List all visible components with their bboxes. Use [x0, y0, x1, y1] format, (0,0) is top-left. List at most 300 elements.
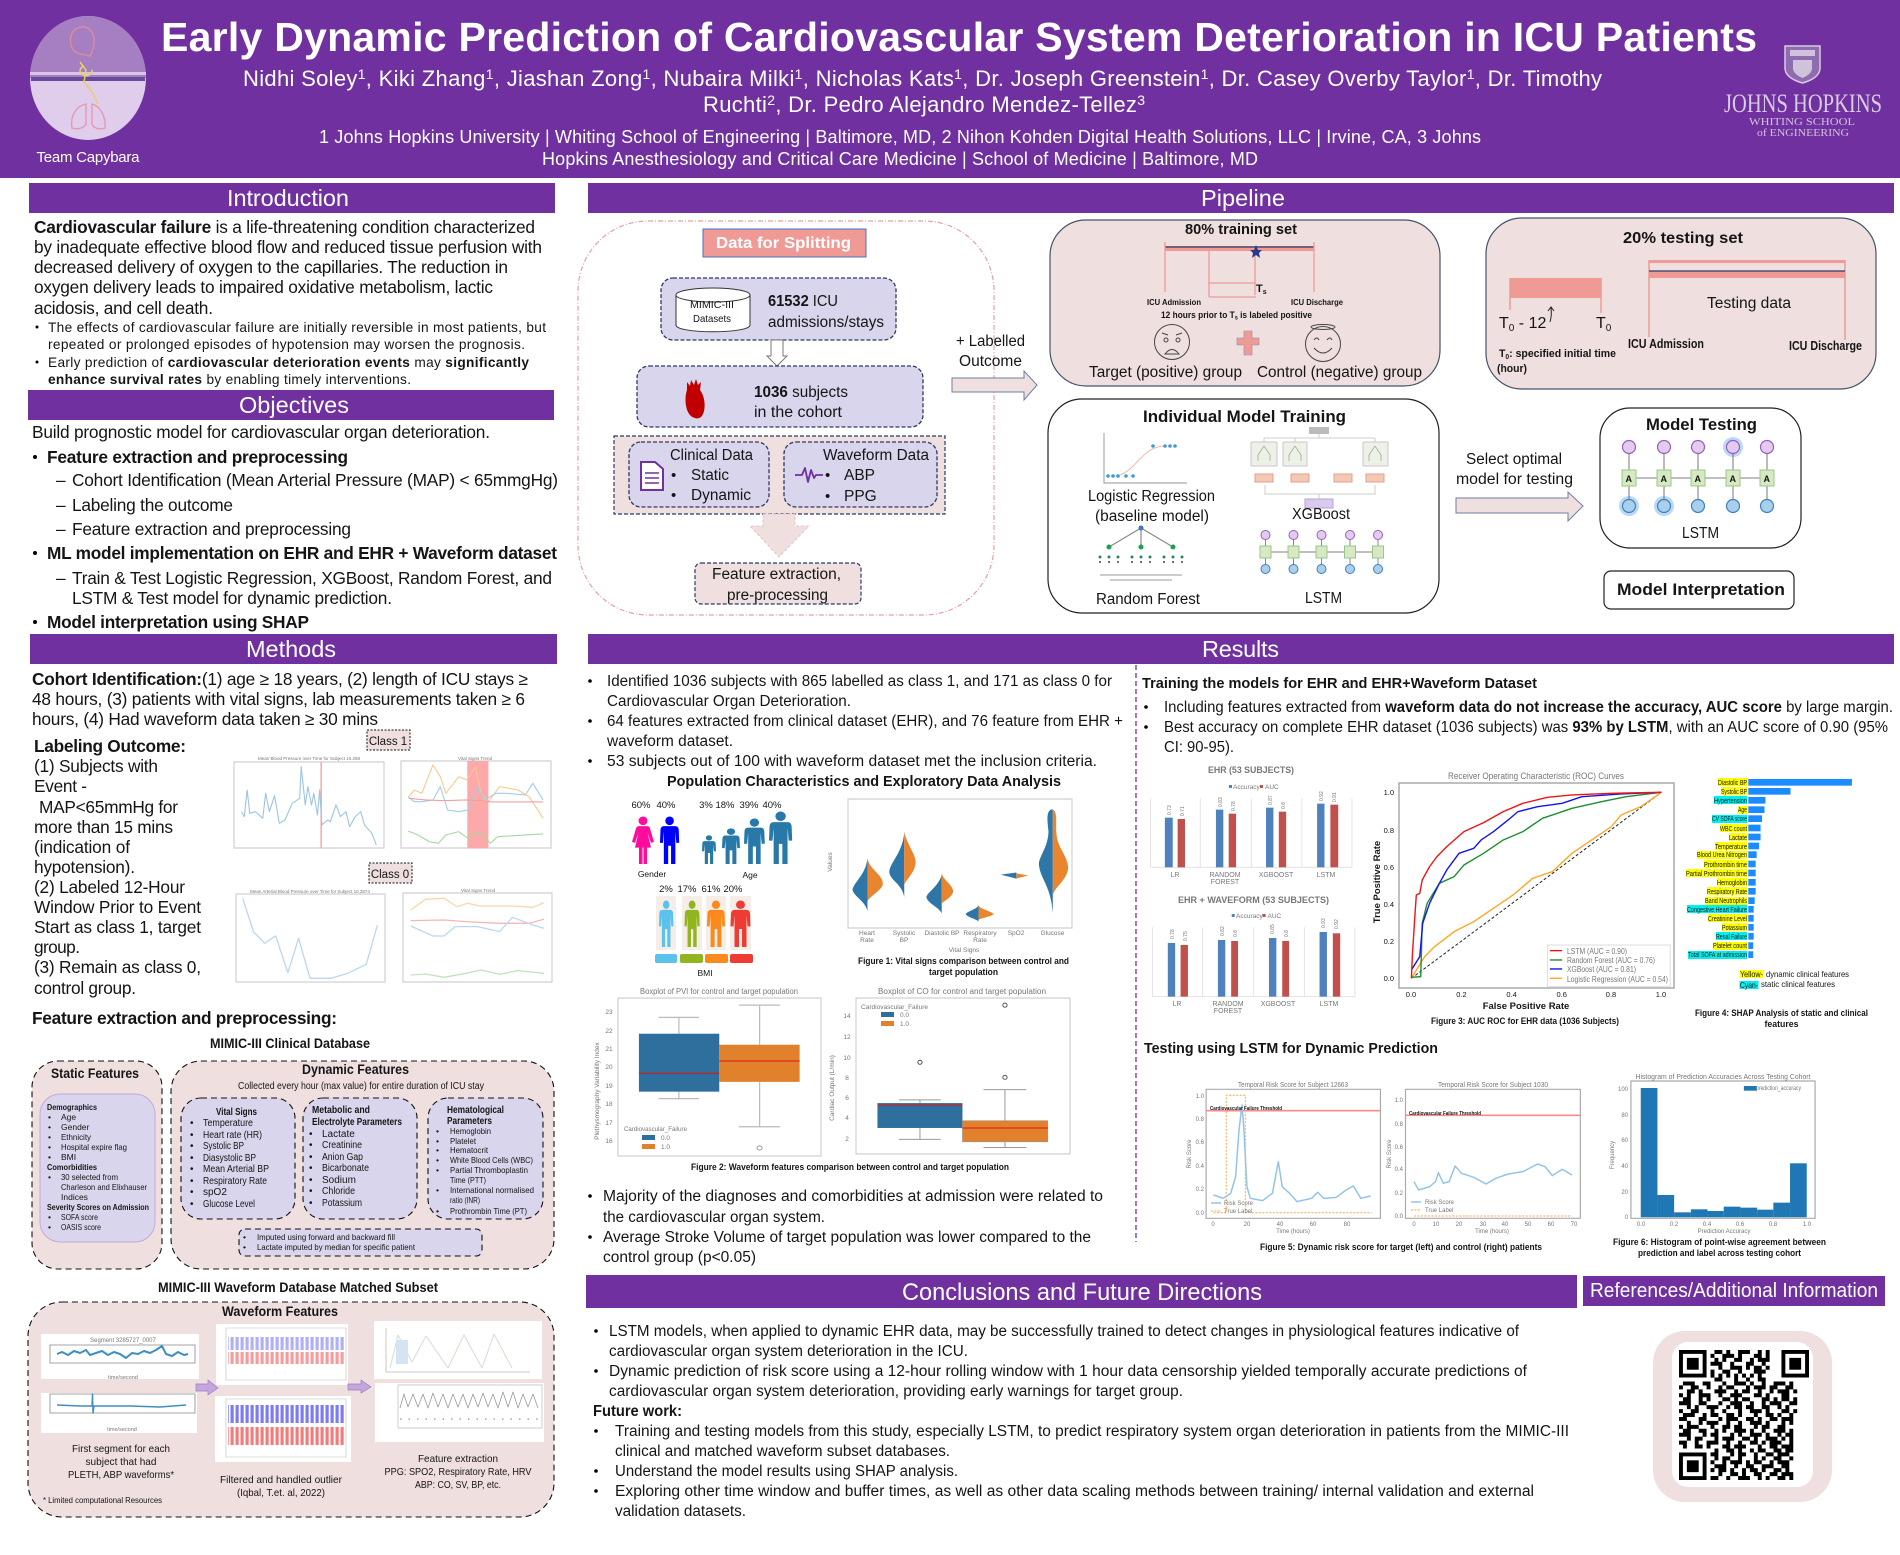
chart: risk score target: [1187, 1080, 1380, 1235]
chart: boxplot PVI: 20: [605, 1064, 613, 1071]
static feature list: Indices: [61, 1192, 88, 1202]
chart: EHR bars: LSTM: [1317, 872, 1336, 879]
chart: EHR + waveform bars: Accuracy: [1236, 913, 1263, 920]
bullets: reversibility and early prediction: enhance survival rates by enabling timely interventions.: [48, 372, 411, 387]
caption: first segment: First segment for each: [72, 1443, 170, 1455]
chart: EHR bars: [1151, 765, 1352, 886]
text: conclusions: Future work:: [593, 1403, 682, 1420]
hematological list: [428, 1098, 543, 1219]
static feature list: Charleson and Elixhauser: [61, 1182, 147, 1192]
chart: risk score control: Temporal Risk Score for Subject 1030: [1438, 1080, 1548, 1089]
clinical data: Static: [691, 467, 729, 484]
subheading: testing using LSTM: Testing using LSTM for Dynamic Prediction: [1144, 1040, 1438, 1057]
SHAP legend: [1740, 969, 1849, 990]
chart: logistic regression: [1088, 433, 1215, 525]
metabolic list: •: [309, 1186, 313, 1197]
chart: risk score target: Cardiovascular Failure Threshold: [1210, 1106, 1282, 1112]
chart: logistic regression: (baseline model): [1095, 508, 1209, 525]
vital signs list: spO2: [203, 1187, 227, 1198]
hematological list: ratio (INR): [450, 1195, 480, 1205]
timeline diagram: [1147, 242, 1343, 322]
text: labeling outcome: (3) Remain as class 0,: [34, 957, 201, 977]
SHAP legend: Cyan-: [1740, 980, 1758, 990]
static feature list: Age: [61, 1112, 76, 1122]
chart: EHR bars: XGBOOST: [1259, 872, 1294, 879]
text: labeling outcome: Event -: [34, 776, 87, 796]
caption: feature extraction: ABP: CO, SV, BP, etc.: [415, 1479, 501, 1491]
chart: risk score control: 0.4: [1395, 1167, 1404, 1173]
box: MIMIC-III datasets: MIMIC-III: [690, 299, 734, 311]
text: cohort findings: [588, 673, 1123, 770]
authors: , Kiki Zhang: [366, 66, 485, 91]
authors: 1: [795, 66, 803, 82]
waveform data: Waveform Data: [823, 447, 929, 464]
objectives list: Cohort Identification (Mean Arterial Pressure (MAP) < 65mmgHg): [72, 470, 558, 490]
tag: data for splitting: [703, 229, 866, 257]
chart: risk score control: 70: [1571, 1222, 1578, 1228]
chart: boxplot PVI: Plethysmography Variability Index: [594, 1042, 601, 1140]
panel: 80% training set: [1050, 220, 1440, 386]
icons: BMI: 2%: [659, 884, 673, 895]
label: select optimal model: model for testing: [1456, 471, 1573, 488]
chart: prediction accuracy histogram: Prediction Accuracy: [1698, 1229, 1750, 1235]
chart: ROC curves: [1372, 771, 1674, 1012]
caption: figure 1: target population: [929, 967, 998, 978]
team logo: [30, 16, 146, 166]
label: labelled outcome: + Labelled: [956, 333, 1025, 350]
metabolic list: •: [309, 1152, 313, 1163]
authors: 2: [767, 92, 775, 108]
chart: EHR + waveform bars: EHR + WAVEFORM (53 SUBJECTS): [1178, 895, 1329, 906]
group labels: Target (positive) group: [1089, 364, 1242, 381]
waveform data: ABP: [844, 467, 875, 484]
metabolic list: Lactate: [322, 1129, 355, 1140]
chart: ROC curves: 0.4: [1384, 900, 1394, 909]
chart: EHR + waveform bars: 0.78: [1170, 929, 1176, 939]
chart: EHR + waveform bars: LR: [1173, 1001, 1181, 1008]
panel: methods: [30, 634, 557, 1051]
chart: prediction accuracy histogram: 0.0: [1637, 1222, 1646, 1228]
chart: risk score control: 50: [1525, 1222, 1532, 1228]
chart: risk score control: 0.2: [1395, 1191, 1404, 1197]
timeline diagram: ICU Admission: [1147, 297, 1201, 307]
text: cardiovascular failure definition: Cardiovascular failure is a life-threatening condition characterized: [34, 217, 535, 237]
text: cohort findings: 64 features extracted from clinical dataset (EHR), and 76 feature from EHR +: [607, 713, 1123, 730]
box: 1036 subjects: 1036 subjects: [754, 384, 848, 401]
chart: risk score control: 0.0: [1395, 1214, 1404, 1220]
text: cardiovascular failure definition: [34, 217, 542, 318]
chart: boxplot CO: 4: [845, 1115, 849, 1122]
objectives list: LSTM & Test model for dynamic prediction.: [72, 588, 392, 608]
diagram: random forest: Random Forest: [1096, 591, 1201, 608]
SHAP legend: dynamic clinical features: [1766, 969, 1849, 979]
chart: logistic regression: Logistic Regression: [1088, 488, 1215, 505]
label: labelled outcome: [956, 333, 1025, 370]
hematological list: •: [436, 1206, 439, 1216]
tag: data for splitting: Data for Splitting: [716, 235, 851, 252]
text: comorbidities and stroke volume: [588, 1188, 1103, 1266]
text: labeling outcome: (1) Subjects with: [34, 756, 158, 776]
chart: prediction accuracy histogram: [1610, 1072, 1815, 1235]
text: cohort findings: Identified 1036 subjects with 865 labelled as class 1, and 171 as class 0 for: [607, 673, 1112, 690]
JHU logo: WHITING SCHOOL: [1749, 117, 1855, 128]
icons: BMI: BMI: [697, 968, 713, 978]
vital signs list: •: [190, 1153, 194, 1164]
icon: heart: [686, 379, 705, 418]
chart: vital signs trend class 1: Vital Signs Trend: [458, 756, 492, 761]
caption: figure 4: features: [1764, 1019, 1798, 1030]
timeline diagram: ICU Admission: [1628, 337, 1704, 351]
chart: prediction accuracy histogram: Histogram of Prediction Accuracies Across Testing Cohort: [1636, 1072, 1811, 1081]
objectives list: Feature extraction and preprocessing: [72, 519, 351, 539]
diagram: XGBoost: XGBoost: [1292, 506, 1351, 523]
panel: 20% testing set: [1486, 218, 1876, 389]
caption: figure 1: [858, 956, 1069, 978]
text: conclusions: [593, 1323, 1569, 1520]
chart: EHR bars: 0.71: [1180, 806, 1186, 816]
panel: static features: [32, 1061, 162, 1269]
objectives list: –: [56, 519, 66, 539]
caption: feature extraction: PPG: SPO2, Respiratory Rate, HRV: [384, 1466, 532, 1478]
chart: violin vital signs: Systolic: [893, 930, 916, 937]
chart: EHR bars: 0.87: [1268, 795, 1274, 805]
heading: methods: [30, 634, 557, 664]
chart: boxplot PVI: 21: [605, 1046, 613, 1053]
chart: EHR + waveform bars: 0.82: [1220, 926, 1226, 936]
heading: introduction: [29, 183, 555, 213]
chart: risk score target: 0.8: [1196, 1117, 1205, 1123]
timeline diagram: - 12: [1514, 315, 1546, 332]
authors: 1: [1467, 66, 1475, 82]
icons: BMI: [655, 884, 753, 978]
panel: waveform features: [28, 1302, 554, 1517]
subheading: population characteristics: Population Characteristics and Exploratory Data Analysis: [667, 773, 1061, 790]
icons: age: 40%: [762, 800, 782, 811]
chart: EHR bars: AUC: [1265, 784, 1279, 791]
chart: ROC curves: 0.2: [1384, 937, 1394, 946]
heading: results: Results: [1202, 636, 1279, 662]
chart: risk score control: Cardiovascular Failure Threshold: [1409, 1111, 1481, 1117]
metabolic list: •: [309, 1140, 313, 1151]
text: cohort identification: 48 hours, (3) patients with vital signs, lab measurements taken ≥ 6: [32, 689, 525, 709]
chart: SHAP analysis: Potassium: [1722, 925, 1747, 932]
chart: risk score target: 40: [1277, 1222, 1284, 1228]
chart: risk score control: 60: [1548, 1222, 1555, 1228]
chart: violin vital signs: Values: [827, 852, 834, 872]
panel: waveform features: Waveform Features: [222, 1303, 338, 1319]
chart: risk score control: 1.0: [1395, 1098, 1404, 1104]
chart: EHR bars: 0.92: [1319, 791, 1325, 801]
hematological list: Platelet: [450, 1136, 477, 1146]
hematological list: •: [436, 1136, 439, 1146]
text: cohort findings: Cardiovascular Organ Deterioration.: [607, 693, 851, 710]
text: labeling outcome: [34, 736, 201, 998]
QR code: [1653, 1331, 1832, 1502]
chart: risk score target: Temporal Risk Score for Subject 12663: [1238, 1080, 1348, 1089]
JHU logo: [1724, 46, 1882, 139]
metabolic list: Anion Gap: [322, 1152, 363, 1163]
chart: violin vital signs: Glucose: [1041, 930, 1065, 937]
caption: feature extraction: Feature extraction: [418, 1453, 498, 1465]
chart: ROC curves: 1.0: [1656, 990, 1666, 999]
chart: ROC curves: 0.8: [1384, 826, 1394, 835]
chart: prediction accuracy histogram: prediction_accuracy: [1756, 1086, 1801, 1092]
chart: EHR + waveform bars: RANDOM: [1212, 1001, 1244, 1008]
panel: dynamic features: [171, 1061, 554, 1269]
static feature list: [40, 1094, 155, 1242]
timeline diagram: T: [1499, 348, 1506, 360]
imputation note: •: [243, 1232, 246, 1242]
icons: gender: 60%: [631, 800, 651, 811]
imputation note: Imputed using forward and backward fill: [257, 1232, 395, 1242]
chart: prediction accuracy histogram: 0.8: [1769, 1222, 1778, 1228]
static feature list: OASIS score: [61, 1222, 101, 1232]
icon: plus: [1237, 331, 1259, 355]
chart: EHR + waveform bars: 0.75: [1183, 931, 1189, 941]
chart: boxplot PVI: 19: [605, 1083, 613, 1090]
plot: filtered PPG: [216, 1324, 348, 1385]
chart: EHR bars: LR: [1171, 872, 1179, 879]
objectives list: Build prognostic model for cardiovascular organ deterioration.: [32, 422, 490, 442]
chart: vital signs trend class 0: Vital Signs Trend: [461, 888, 495, 893]
chart: boxplot CO: 10: [843, 1055, 851, 1062]
chart: risk score control: 20: [1456, 1222, 1463, 1228]
chart: risk score target: 0.6: [1196, 1140, 1205, 1146]
metabolic list: Creatinine: [322, 1140, 362, 1151]
JHU logo: of ENGINEERING: [1757, 128, 1849, 139]
plot: PLETH segment: [41, 1334, 199, 1381]
chart: prediction accuracy histogram: 60: [1621, 1138, 1629, 1144]
chart: boxplot CO: 1.0: [900, 1021, 909, 1028]
timeline diagram: [1497, 260, 1862, 375]
chart: risk score target: 0.0: [1196, 1211, 1205, 1217]
icons: gender: [631, 800, 679, 879]
caption: figure 5: Figure 5: Dynamic risk score for target (left) and control (right) patients: [1260, 1242, 1542, 1253]
box: clinical and waveform data: [614, 436, 945, 514]
text: labeling outcome: MAP<65mmHg for: [39, 797, 178, 817]
metabolic list: Metabolic and: [312, 1105, 370, 1116]
static feature list: Gender: [61, 1122, 90, 1132]
caption: figure 6: Figure 6: Histogram of point-wise agreement between: [1613, 1237, 1826, 1248]
hematological list: Hematological: [447, 1105, 504, 1116]
waveform data: [784, 442, 937, 507]
chart: risk score target: Risk Score: [1187, 1139, 1193, 1169]
text: cohort findings: 53 subjects out of 100 with waveform dataset met the inclusion criteria.: [607, 753, 1097, 770]
vital signs list: •: [190, 1187, 194, 1198]
panel: objectives: [28, 390, 558, 632]
plot: PLETH segment: Segment 3285727_0007: [90, 1338, 157, 1344]
authors: 1: [643, 66, 651, 82]
static feature list: •: [48, 1142, 51, 1152]
diagram: LSTM: A: [1764, 474, 1770, 484]
chart: risk score target: Risk Score: [1224, 1201, 1254, 1207]
panel: introduction: [29, 183, 555, 387]
chart: risk score target: True Label: [1224, 1209, 1252, 1215]
static feature list: •: [48, 1212, 51, 1222]
timeline diagram: s: [1235, 316, 1238, 322]
waveform data: •: [825, 467, 830, 484]
chart: ROC curves: True Positive Rate: [1372, 841, 1383, 923]
heading: objectives: [28, 390, 554, 420]
chart: risk score control: 0.6: [1395, 1145, 1404, 1151]
text: labeling outcome: more than 15 mins: [34, 817, 173, 837]
chart: SHAP analysis: Creatinine Level: [1708, 916, 1747, 923]
subheading: feature extraction: Feature extraction and preprocessing:: [32, 1008, 337, 1028]
authors: , Dr. Pedro Alejandro Mendez-Tellez: [775, 92, 1137, 117]
imputation note: •: [243, 1242, 246, 1252]
box: feature extraction: Feature extraction,: [712, 566, 841, 583]
text: cohort identification: hours, (4) Had waveform data taken ≥ 30 mins: [32, 709, 378, 729]
chart: risk score control: [1387, 1080, 1580, 1235]
caption: filtered: [220, 1474, 342, 1499]
box: model interpretation: [1604, 571, 1794, 609]
affiliations: [319, 127, 1481, 169]
chart: risk score control: 10: [1433, 1222, 1440, 1228]
static feature list: BMI: [61, 1152, 76, 1162]
chart: SHAP analysis: Platelet count: [1713, 943, 1747, 950]
metabolic list: Electrolyte Parameters: [312, 1117, 402, 1128]
hematological list: Partial Thromboplastin: [450, 1165, 528, 1175]
authors: 3: [1137, 92, 1145, 108]
box: feature extraction: [695, 563, 861, 604]
arrow: to model testing: [1456, 492, 1583, 521]
chart: ROC curves: 0.2: [1456, 990, 1467, 999]
chart: SHAP analysis: Temperature: [1715, 844, 1747, 851]
panel: model testing: Model Testing: [1646, 416, 1757, 434]
plot: feature schematic: [374, 1321, 542, 1379]
clinical data: •: [671, 467, 676, 484]
authors: 1: [954, 66, 962, 82]
vital signs list: [181, 1098, 295, 1219]
text: labeling outcome: (2) Labeled 12-Hour: [34, 877, 185, 897]
chart: SHAP analysis: Hypertension: [1714, 798, 1747, 805]
timeline diagram: Testing data: [1707, 295, 1791, 312]
chart: prediction accuracy histogram: 0.6: [1736, 1222, 1745, 1228]
chart: ROC curves: 0.0: [1384, 974, 1394, 983]
text: conclusions: Exploring other time window and buffer times, as well as other data scaling methods between training/ internal validation and external: [615, 1483, 1534, 1500]
metabolic list: [303, 1098, 417, 1219]
chart: boxplot PVI: Cardiovascular_Failure: [624, 1126, 687, 1133]
authors: Ruchti: [703, 92, 767, 117]
chart: boxplot PVI: 0.0: [661, 1135, 670, 1142]
text: labeling outcome: control group.: [34, 978, 136, 998]
label: select optimal model: [1456, 451, 1573, 488]
chart: violin vital signs: Vital Signs: [949, 947, 980, 954]
text: conclusions: LSTM models, when applied to dynamic EHR data, may be successfully trained to detect changes in physiological features indicative of: [609, 1323, 1520, 1340]
heading: introduction: Introduction: [227, 185, 349, 211]
authors: , Nicholas Kats: [803, 66, 954, 91]
chart: boxplot CO: 0.0: [900, 1012, 909, 1019]
text: labeling outcome: (indication of: [34, 837, 130, 857]
box: MIMIC-III datasets: Datasets: [693, 313, 731, 325]
chart: risk score target: Time (hours): [1276, 1229, 1310, 1235]
text: cardiovascular failure definition: acidosis, and cell death.: [34, 298, 213, 318]
waveform data: •: [825, 488, 830, 505]
footnote: * Limited computational Resources: [43, 1496, 162, 1505]
chart: EHR + waveform bars: AUC: [1268, 913, 1282, 920]
team name: Team Capybara: [36, 149, 140, 166]
chart: violin vital signs: [827, 799, 1072, 954]
text: conclusions: cardiovascular organ system deterioration, providing early warnings for target group.: [609, 1383, 1183, 1400]
tag: class 0: [369, 863, 412, 883]
caption: feature extraction: [384, 1453, 532, 1491]
heading: references: References/Additional Information: [1590, 1280, 1878, 1302]
subheading: training the models: Training the models for EHR and EHR+Waveform Dataset: [1142, 675, 1537, 692]
text: training findings: Including features extracted from waveform data do not increase the accuracy, AUC score by large margin.: [1164, 699, 1893, 716]
plot: filtered ABP: [215, 1396, 351, 1462]
static feature list: •: [48, 1112, 51, 1122]
static feature list: Ethnicity: [61, 1132, 92, 1142]
chart: boxplot CO: 12: [843, 1034, 851, 1041]
panel: individual model training: Individual Model Training: [1143, 408, 1346, 426]
hematological list: •: [436, 1126, 439, 1136]
panel: dynamic features: Collected every hour (max value) for entire duration of ICU stay: [238, 1081, 484, 1092]
panel: model testing: [1600, 408, 1801, 548]
diagram: LSTM: A: [1694, 474, 1702, 484]
objectives list: –: [56, 470, 66, 490]
heading: conclusions: [586, 1275, 1577, 1308]
vital signs list: •: [190, 1164, 194, 1175]
chart: risk score target: 60: [1310, 1222, 1317, 1228]
chart: violin vital signs: Diastolic BP: [924, 930, 960, 937]
caption: first segment: PLETH, ABP waveforms*: [68, 1469, 174, 1481]
authors: 1: [358, 66, 366, 82]
chart: boxplot CO: [829, 987, 1070, 1154]
chart: prediction accuracy histogram: 0.4: [1703, 1222, 1712, 1228]
diagram: LSTM: A: [1626, 474, 1632, 484]
icons: age: Age: [742, 870, 758, 880]
chart: ROC curves: 0.8: [1606, 990, 1616, 999]
timeline diagram: 0: [1509, 323, 1515, 334]
metabolic list: •: [309, 1163, 313, 1174]
text: training findings: Best accuracy on complete EHR dataset (1036 subjects) was 93% by LSTM, with an AUC score of 0.90 (95%: [1164, 719, 1888, 736]
diagram: XGBoost: [1251, 427, 1388, 523]
chart: boxplot PVI: 22: [605, 1028, 613, 1035]
timeline diagram: ICU Discharge: [1789, 339, 1862, 353]
chart: EHR bars: 0.73: [1167, 805, 1173, 815]
clinical data: •: [671, 487, 676, 504]
imputation note: Lactate imputed by median for specific patient: [257, 1242, 416, 1252]
chart: ROC curves: XGBoost (AUC = 0.81): [1567, 965, 1636, 974]
chart: prediction accuracy histogram: Frequency: [1610, 1141, 1616, 1169]
chart: ROC curves: Random Forest (AUC = 0.76): [1567, 956, 1655, 965]
static feature list: Demographics: [47, 1102, 97, 1112]
static feature list: •: [48, 1122, 51, 1132]
metabolic list: •: [309, 1175, 313, 1186]
caption: first segment: [68, 1443, 174, 1481]
timeline diagram: ICU Discharge: [1291, 297, 1343, 307]
data for splitting flow: [578, 221, 994, 615]
timeline diagram: T: [1596, 315, 1606, 332]
subheading: waveform database: MIMIC-III Waveform Database Matched Subset: [158, 1279, 438, 1295]
text: comorbidities and stroke volume: the cardiovascular organ system.: [603, 1209, 825, 1226]
clinical data: Clinical Data: [670, 447, 753, 464]
chart: ROC curves: 1.0: [1384, 788, 1394, 797]
chart: boxplot PVI: 18: [605, 1101, 613, 1108]
icons: BMI: 61%: [701, 884, 721, 895]
chart: SHAP analysis: Respiratory Rate: [1707, 889, 1747, 896]
static feature list: •: [48, 1132, 51, 1142]
arrow: to extraction: [348, 1380, 371, 1393]
metabolic list: Bicarbonate: [322, 1163, 369, 1174]
chart: prediction accuracy histogram: 40: [1621, 1164, 1629, 1170]
vital signs list: •: [190, 1141, 194, 1152]
label: select optimal model: Select optimal: [1466, 451, 1562, 468]
tag: class 0: Class 0: [371, 869, 409, 881]
timeline diagram: T: [1256, 283, 1263, 295]
diagram: LSTM: A: [1730, 474, 1736, 484]
metabolic list: •: [309, 1129, 313, 1140]
